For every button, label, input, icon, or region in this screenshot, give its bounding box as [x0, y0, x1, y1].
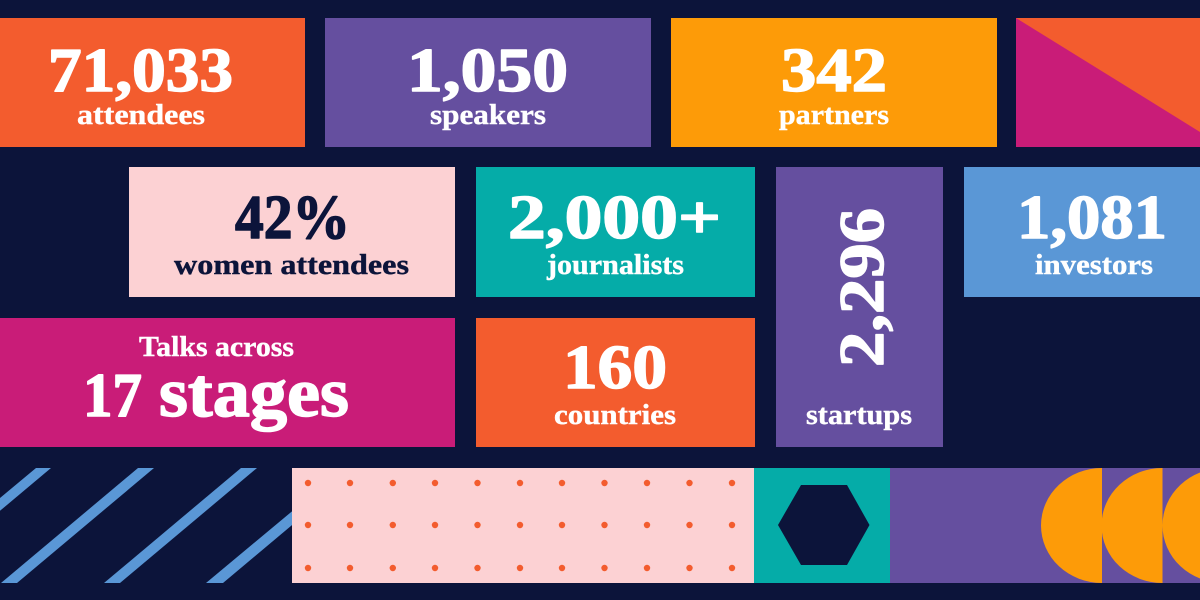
label: startups: startups: [806, 400, 912, 431]
panel: purple with orange semicircles: [890, 468, 1200, 583]
number: 160: 160: [563, 334, 667, 402]
number: 342: 342: [781, 37, 887, 105]
number: 1,081: 1,081: [1017, 184, 1167, 252]
label: attendees: attendees: [77, 100, 205, 131]
panel: talks across 17 stages: [0, 318, 455, 447]
label: women attendees: women attendees: [174, 250, 409, 281]
panel: journalists: [476, 167, 755, 297]
panel: partners: [671, 18, 997, 147]
label: talks across: Talks across: [139, 332, 294, 363]
panel: startups: [776, 167, 943, 447]
panel: countries: [476, 318, 755, 447]
number: 42%: 42%: [235, 184, 350, 252]
panel: speakers: [325, 18, 651, 147]
number: 2,000+: 2,000+: [508, 184, 721, 252]
panel: attendees: [0, 18, 305, 147]
icon: hexagon on teal panel: [754, 468, 890, 583]
panel: women attendees: [129, 167, 455, 297]
label: journalists: journalists: [546, 250, 684, 281]
label: partners: partners: [779, 100, 889, 131]
number: 17: 17: [83, 362, 142, 430]
label: countries: countries: [554, 400, 676, 431]
label: investors: investors: [1035, 250, 1153, 281]
pattern: pink panel with orange dots: [292, 468, 754, 583]
pattern: diagonal blue stripes: [0, 468, 360, 583]
number: 2,296 (rotated): 2,296: [826, 208, 897, 367]
decorative panel: diagonal split: [1016, 18, 1200, 147]
number: 71,033: 71,033: [48, 37, 233, 105]
label: stages: stages: [159, 355, 349, 432]
panel: investors: [964, 167, 1200, 297]
label: speakers: speakers: [430, 100, 546, 131]
number: 1,050: 1,050: [407, 37, 568, 105]
